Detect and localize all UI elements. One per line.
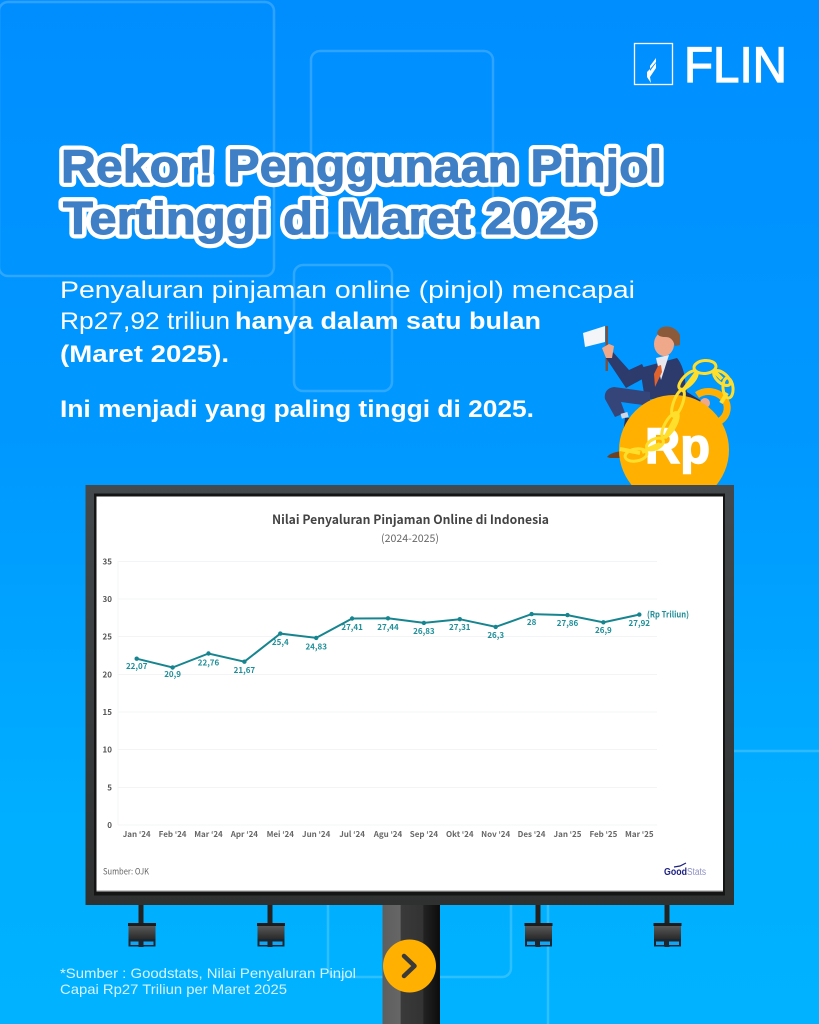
y axis labels: 15 [103,707,112,718]
data labels [126,617,650,680]
ball handle [697,392,727,421]
data labels: 25,4 [272,637,289,648]
title: Rekor! Penggunaan Pinjol [61,140,662,192]
x axis labels: Jan ‘24 [123,829,151,840]
intro text: Ini menjadi yang paling tinggi di 2025. [60,396,534,423]
data labels: 27,44 [377,622,399,633]
x axis labels: Agu ‘24 [373,829,403,840]
logo: FLIN [634,37,787,93]
Rp on ball: Rp [645,418,710,474]
ball [619,395,729,485]
head [654,332,674,356]
x axis labels: Sep ‘24 [410,829,438,840]
intro text: (Maret 2025). [60,341,229,368]
x axis labels: Mar ‘25 [625,829,654,840]
footnote: Capai Rp27 Triliun per Maret 2025 [60,981,287,997]
y axis labels: 20 [103,670,112,680]
next arrow button [383,940,436,992]
torso [640,358,685,400]
data labels: 24,83 [305,642,327,652]
GoodStats logo [664,863,706,878]
intro text: Penyaluran pinjaman online (pinjol) mencapai [60,277,635,304]
chart subtitle: (2024-2025) [381,531,439,546]
far leg and shoe [621,418,638,452]
data labels: 21,67 [234,665,255,676]
hand on flag [602,344,614,358]
unit label: (Rp Triliun) [647,608,689,620]
x axis labels: Jun ‘24 [302,829,331,840]
data labels: 28 [527,617,537,628]
y axis labels: 5 [107,782,112,794]
man [602,326,710,458]
billboard pole [382,904,440,1024]
title: Rekor! Penggunaan Pinjol [61,140,662,192]
y axis labels: 10 [103,744,112,756]
GoodStats logo: Good [664,867,687,878]
intro text [60,277,635,423]
data points [134,612,642,670]
x axis labels: Jan ‘25 [554,829,582,840]
footnote [60,965,356,997]
y axis labels: 0 [107,820,112,831]
data labels: 27,92 [629,618,650,629]
brackets [128,905,682,947]
x axis labels: Feb ‘24 [159,829,187,840]
data labels: 27,41 [341,622,363,633]
footnote: *Sumber : Goodstats, Nilai Penyaluran Pinjol [60,965,356,981]
GoodStats logo: Stats [687,867,706,878]
raised arm [606,351,648,388]
x axis labels: Nov ‘24 [481,829,510,840]
thigh and bent leg [605,387,650,417]
y axis labels: 25 [103,632,112,642]
y axis labels: 35 [103,556,112,568]
data labels: 22,07 [126,661,148,672]
title [61,140,662,244]
x axis labels: Jul ‘24 [339,829,365,840]
intro text: Rp27,92 triliun [60,308,230,335]
billboard frame [86,485,734,905]
data labels: 26,3 [487,630,504,641]
x axis labels: Mar ‘24 [194,829,223,840]
illustration: businessman on Rp ball [583,326,735,485]
data labels: 27,31 [449,622,471,633]
x axis labels: Feb ‘25 [589,829,618,840]
title: Tertinggi di Maret 2025 [63,192,594,244]
x axis labels: Apr ‘24 [230,829,258,840]
y axis labels: 30 [103,594,112,605]
data labels: 26,83 [413,626,435,637]
source text: Sumber: OJK [103,866,149,878]
x axis labels: Des ‘24 [518,829,546,840]
chart title: Nilai Penyaluran Pinjaman Online di Indonesia [272,509,549,528]
data labels: 20,9 [164,669,181,680]
logo: FLIN: FLIN [684,37,787,93]
white flag [583,326,608,371]
data labels: 26,9 [595,625,612,636]
y axis labels [103,556,112,831]
x axis labels [123,829,654,840]
x axis labels: Okt ‘24 [446,829,474,840]
data line [137,614,639,668]
title: Tertinggi di Maret 2025 [63,192,594,244]
data labels: 22,76 [198,658,220,668]
data labels: 27,86 [557,618,579,629]
intro text: hanya dalam satu bulan [235,308,541,335]
grid [118,561,657,825]
chain [620,360,734,463]
shirt and tie [656,355,669,380]
back arm [676,362,706,412]
x axis labels: Mei ‘24 [267,829,294,840]
line chart [103,556,689,840]
